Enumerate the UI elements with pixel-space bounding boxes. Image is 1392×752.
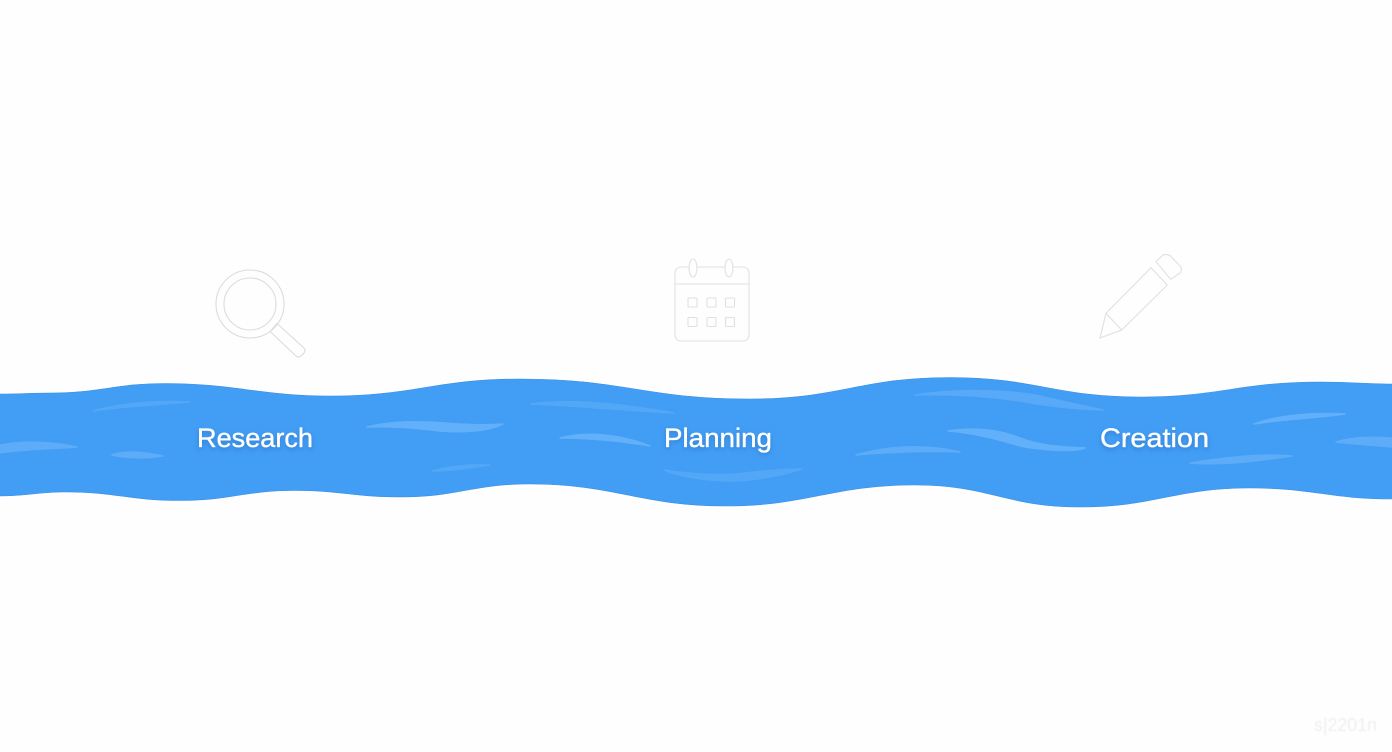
label: Research: Research [197, 423, 313, 453]
river band [0, 378, 1392, 507]
icon: calendar [675, 259, 749, 341]
icon: pencil [1100, 255, 1182, 338]
label: Creation: Creation [1100, 423, 1209, 453]
water ripples [0, 391, 1392, 481]
watermark: s|2201n [1314, 715, 1377, 735]
icon: magnifying glass [216, 270, 305, 357]
label: Planning: Planning [664, 423, 772, 453]
